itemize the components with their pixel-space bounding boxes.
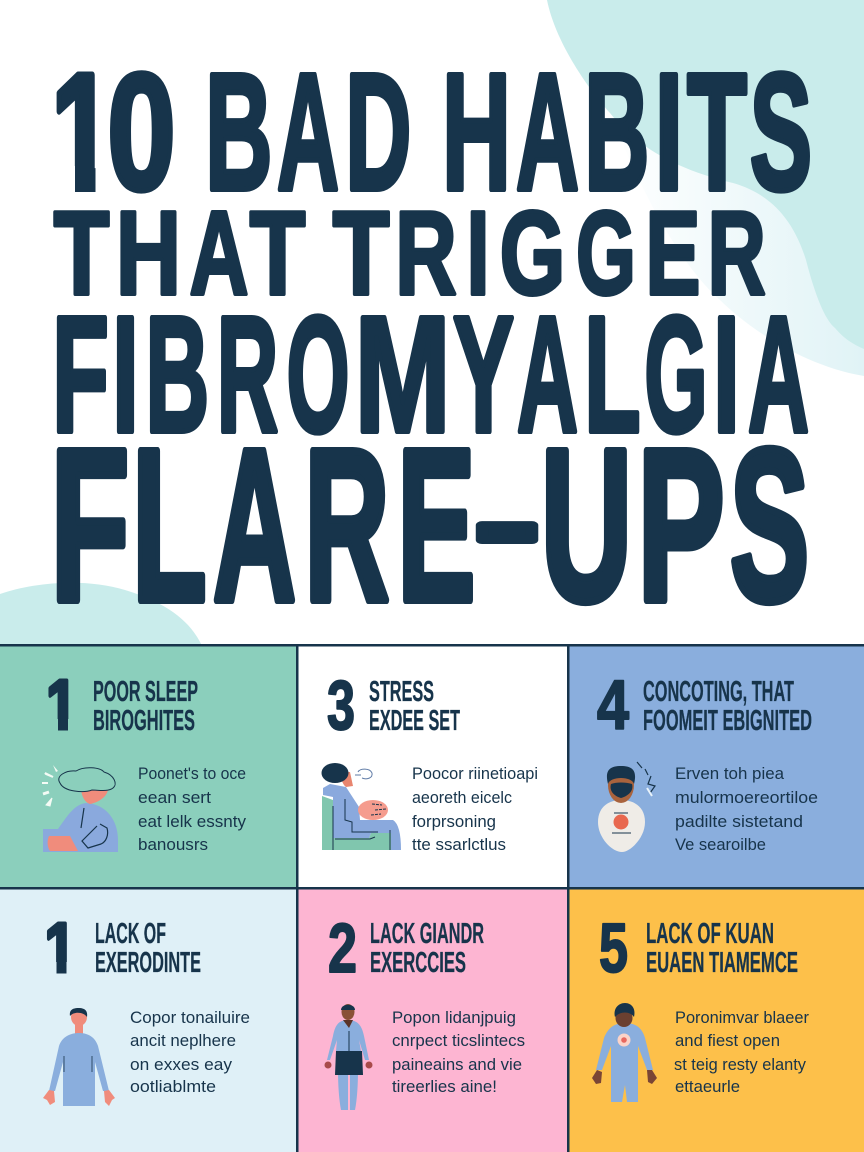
title: B <box>205 39 272 225</box>
number 2: 2 <box>328 909 357 987</box>
heading: LACK OF <box>95 918 166 950</box>
body text: and fiest open <box>675 1032 780 1050</box>
background blob: top right light band <box>610 113 864 376</box>
body text <box>674 1009 810 1096</box>
icon: person with foggy head <box>42 765 118 852</box>
body text <box>412 765 538 854</box>
title: A <box>516 39 579 225</box>
title: I <box>713 282 740 466</box>
heading: EXERCCIES <box>370 947 466 979</box>
title: 0 <box>107 39 176 225</box>
heading: EXERODINTE <box>95 947 201 979</box>
body text <box>138 765 247 854</box>
heading <box>643 676 812 737</box>
title: R <box>708 187 766 320</box>
body text: ancit neplhere <box>130 1032 236 1050</box>
icon: standing person with chest spot <box>592 1003 657 1102</box>
title: A <box>190 187 248 320</box>
body text: Poronimvar blaeer <box>675 1009 810 1027</box>
title: I <box>654 39 683 225</box>
title: G <box>500 187 565 320</box>
title: F <box>52 282 109 466</box>
title: T <box>687 39 747 225</box>
title: B <box>584 39 649 225</box>
title: L <box>132 404 207 646</box>
body text: banousrs <box>138 836 208 854</box>
title: G <box>644 282 708 466</box>
heading: STRESS <box>369 676 434 708</box>
title: P <box>637 404 725 646</box>
title: B <box>146 282 209 466</box>
title: I <box>466 187 490 320</box>
title: R <box>217 282 278 466</box>
title: H <box>116 187 181 320</box>
title <box>45 39 812 646</box>
body text: Erven toh piea <box>675 765 785 783</box>
title: Y <box>453 282 514 466</box>
heading: LACK OF KUAN <box>646 918 774 950</box>
body text: Poonet's to oce <box>138 765 246 783</box>
title: L <box>584 282 641 466</box>
title: A <box>277 39 339 225</box>
icon: masked person <box>598 762 655 852</box>
panel: stress <box>297 646 568 888</box>
body text: ettaeurle <box>675 1078 740 1096</box>
heading <box>370 918 484 979</box>
title: E <box>646 187 700 320</box>
title: D <box>345 39 411 225</box>
body text: Ve searoilbe <box>675 836 766 854</box>
icon: seated person <box>322 763 401 850</box>
body text: eat lelk essnty <box>138 813 247 831</box>
icon: standing person <box>43 1008 115 1106</box>
body text <box>130 1009 250 1096</box>
number 1: 1 <box>46 666 77 744</box>
title: 1 <box>51 40 113 224</box>
body text: st teig resty elanty <box>674 1056 807 1074</box>
heading: POOR SLEEP <box>93 676 198 708</box>
heading: EXDEE SET <box>369 705 460 737</box>
panel: lack of kuan yellow <box>568 888 864 1152</box>
title: T <box>54 187 109 320</box>
title: - <box>474 453 540 592</box>
background blob: bottom left <box>0 583 202 646</box>
body text: cnrpect ticslintecs <box>392 1032 525 1050</box>
number 4: 4 <box>597 666 629 744</box>
title: R <box>395 187 457 320</box>
title: U <box>541 404 632 646</box>
body text: paineains and vie <box>392 1056 522 1074</box>
number 5: 5 <box>599 909 628 987</box>
title: A <box>213 404 296 646</box>
title: S <box>750 39 812 225</box>
panel: concocting <box>568 646 864 888</box>
body text: tireerlies aine! <box>392 1078 497 1096</box>
number 3: 3 <box>327 666 355 744</box>
title: H <box>442 39 511 225</box>
heading <box>369 676 460 737</box>
title: G <box>576 187 636 320</box>
title: A <box>517 282 578 466</box>
body text <box>392 1009 525 1096</box>
heading <box>646 918 798 979</box>
body text <box>675 765 818 854</box>
title: T <box>250 187 305 320</box>
body text: ootliablmte <box>130 1078 216 1096</box>
body text: tte ssarlctlus <box>412 836 506 854</box>
body text: Poocor riinetioapi <box>412 765 538 783</box>
panel: lack of exercises pink <box>297 888 568 1152</box>
heading <box>95 918 201 979</box>
panel: lack of exercise <box>0 888 297 1152</box>
title: M <box>355 282 450 466</box>
title: F <box>50 404 129 646</box>
background blob: top right <box>547 0 864 349</box>
body text: Copor tonailuire <box>130 1009 250 1027</box>
title: T <box>333 187 389 320</box>
title: I <box>112 282 139 466</box>
body text: forprsoning <box>412 813 496 831</box>
title: E <box>397 404 475 646</box>
panel: poor sleep <box>0 646 297 888</box>
body text: Popon lidanjpuig <box>392 1009 516 1027</box>
heading <box>93 676 198 737</box>
body text: mulormoereortiloe <box>675 789 818 807</box>
heading: LACK GIANDR <box>370 918 484 950</box>
heading: BIROGHITES <box>93 705 195 737</box>
title: O <box>287 282 350 466</box>
title: R <box>304 404 389 646</box>
body text: aeoreth eicelc <box>412 789 512 807</box>
body text: padilte sistetand <box>675 813 803 831</box>
number 1: 1 <box>45 908 76 986</box>
body text: on exxes eay <box>130 1056 233 1074</box>
body text: eean sert <box>138 789 211 807</box>
title: A <box>748 282 809 466</box>
icon: standing person in skirt <box>324 1004 372 1110</box>
